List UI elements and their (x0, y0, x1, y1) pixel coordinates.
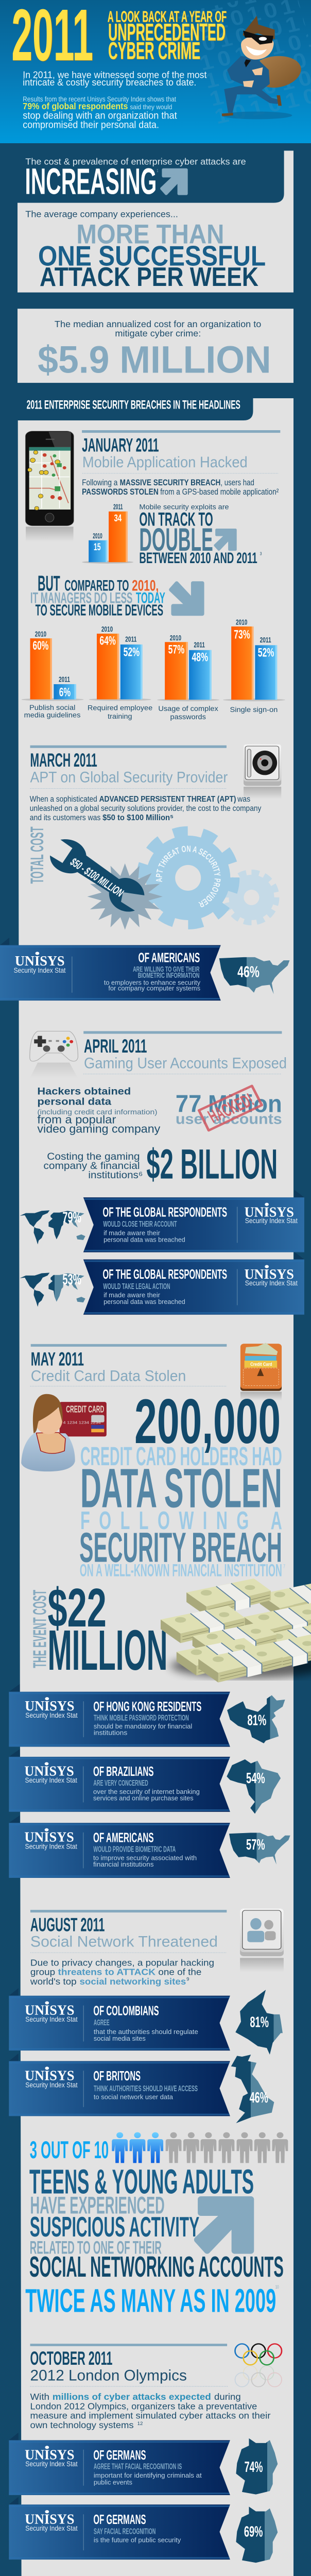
ribbon: Colombians: AGREE (94, 2018, 110, 2027)
icon: social network (240, 1908, 284, 1972)
ribbon: Hong Kong residents: Security Index Stat (25, 1711, 78, 1720)
ribbon: Colombians: social media sites (94, 2035, 146, 2042)
binary pattern (172, 0, 311, 131)
ribbon: Hong Kong residents: should be mandatory for financial (94, 1723, 192, 1730)
text: massive security breach: MASSIVE SECURITY BREACH (120, 478, 220, 487)
ribbon: Americans biometric data: financial institutions (93, 1861, 154, 1868)
ribbon: Brazilians: ARE VERY CONCERNED (93, 1778, 148, 1788)
ribbon: Hong Kong residents: institutions (94, 1730, 127, 1737)
section: header (11, 0, 311, 292)
intro text: stop dealing with an organization that (23, 111, 177, 121)
stat: 200,000 credit card holders: FOLLOWING A (80, 1506, 282, 1535)
map: Colombia 81% (235, 1990, 283, 2055)
text: olympics description: during (214, 2392, 241, 2402)
ribbon: Germans facial recognition important: AGREE THAT FACIAL RECOGNITION IS (94, 2462, 182, 2471)
text: olympics description (30, 2392, 270, 2430)
text: cost and prevalence: The cost & prevalence of enterprise cyber attacks are (25, 157, 246, 167)
section: teens and October (9, 2192, 284, 2495)
icon: wallet (240, 1343, 282, 1400)
ribbon: Britons: OF BRITONS (93, 2068, 141, 2083)
divider bar: October (30, 2344, 227, 2346)
ribbon: Americans biometric: Security Index Stat (14, 967, 66, 975)
divider bar: May (31, 1344, 227, 1347)
text: massive security breach (82, 478, 279, 497)
stat: 77 million hacked: user accounts (176, 1110, 282, 1127)
ribbon: Americans biometric data: UNISYS (24, 1829, 74, 1845)
text: olympics description: measure and implement simulated cyber attacks on their (30, 2411, 270, 2420)
header background (0, 0, 311, 143)
intro text: compromised their personal data. (23, 120, 159, 130)
ribbon: Americans biometric data: OF AMERICANS (93, 1830, 154, 1845)
text: median cost: $5.9 MILLION (38, 338, 271, 381)
section: May stats (21, 1386, 311, 1683)
map: USA 46% (219, 957, 289, 994)
text: hackers obtained: Hackers obtained (37, 1087, 131, 1097)
bar chart: mobile exploits: 2010 (93, 532, 102, 540)
icon: credit card: 4 1234 1234 1234 (63, 1420, 101, 1425)
panel: breaches in the headlines (18, 398, 293, 2576)
ribbon: Germans facial recognition future: SAY FACIAL RECOGNITION (94, 2527, 156, 2536)
ribbon: Germans facial recognition important: Security Index Stat (25, 2460, 78, 2468)
divider bar: August (30, 1910, 227, 1912)
bar chart: usage of complex passwords: passwords (170, 713, 206, 721)
text: hackers obtained: personal data (37, 1096, 112, 1107)
stat: 77 million hacked (176, 1086, 282, 1130)
heading: January 2011 (82, 435, 278, 473)
ribbon: global respondents close account: UNISYS (245, 1205, 294, 1220)
bar chart: publish social media guidelines: 2010 (35, 630, 46, 638)
ribbon: Hong Kong residents: OF HONG KONG RESIDENTS (93, 1699, 201, 1714)
bar chart: usage of complex passwords: Usage of complex (158, 705, 218, 713)
icon: starburst (88, 863, 163, 930)
ribbon: Germans facial recognition important (9, 2433, 230, 2495)
bar chart: required employee training: training (108, 713, 132, 721)
text: threat description (30, 1958, 214, 1987)
map: Germany 69% (236, 2506, 278, 2563)
icon: smartphone with map (25, 431, 74, 541)
text: median cost: The median annualized cost for an organization to (55, 319, 261, 329)
ribbon: Americans biometric data: WOULD PROVIDE BIOMETRIC DATA (93, 1845, 176, 1854)
ribbon: Americans biometric: UNISYS (15, 954, 65, 969)
icon: credit card (60, 1402, 107, 1436)
stat: 2 billion (43, 1141, 278, 1188)
ribbon: Brazilians (9, 1749, 230, 1812)
map: world 53% (20, 1271, 85, 1307)
text: median cost (38, 319, 271, 381)
heading: March 2011: APT on Global Security Provider (30, 769, 228, 786)
map: USA 57% (229, 1833, 290, 1865)
bar chart: mobile exploits: 15 (94, 541, 101, 553)
heading: May 2011: Credit Card Data Stolen (31, 1367, 186, 1384)
heading: but compared to 2010: TODAY (136, 589, 165, 606)
map: China 81%: 81% (247, 1712, 266, 1728)
bar chart: required employee training: 64% (99, 634, 116, 648)
map: USA 57%: 57% (246, 1836, 265, 1853)
ribbon: Americans biometric: for company computer systems (108, 985, 200, 992)
text: more than one successful attack per week: The average company experiences... (25, 210, 178, 219)
section: August (9, 1908, 288, 2201)
bar chart: required employee training: 52% (124, 646, 140, 659)
section: May stats: MILLION (47, 1619, 168, 1683)
icon: wallet: Credit Card (250, 1362, 272, 1367)
text: massive security breach: , users had (220, 478, 254, 487)
text: threat description: world's top (30, 1976, 77, 1987)
ribbon: Germans facial recognition important: important for identifying criminals at (94, 2472, 202, 2479)
text: threat description: Due to privacy changes, a popular hacking (30, 1958, 214, 1968)
text: on track to double: ON TRACK TO (139, 510, 213, 530)
ribbon: Americans biometric: to employers to enhance security (104, 979, 200, 986)
heading: October 2011: 2012 London Olympics (30, 2367, 187, 2384)
map: Germany 74% (236, 2438, 278, 2495)
heading: August 2011: Social Network Threatened (30, 1933, 218, 1950)
text: suspicious activity (29, 2192, 284, 2283)
bar chart: mobile exploits: 2011 (113, 503, 123, 511)
ribbon: global respondents legal action: UNISYS (245, 1267, 294, 1282)
stat: 200,000 credit card holders (79, 1386, 285, 1580)
ribbon: Germans facial recognition future: Security Index Stat (25, 2524, 78, 2533)
heading: October 2011: OCTOBER 2011 (30, 2348, 112, 2369)
arrow: double up (215, 530, 235, 550)
ribbon: global respondents close account: if made aware their (103, 1230, 160, 1237)
section: IT managers and March: TO SECURE MOBILE DEVICES (36, 601, 163, 619)
heading: increasing (25, 161, 159, 202)
map: UK 46% (231, 2055, 274, 2123)
bar chart: usage of complex passwords: 2011 (194, 641, 205, 649)
heading: March 2011 (30, 750, 228, 789)
text: threat description: threatens to ATTACK (58, 1967, 156, 1977)
text: olympics description: London 2012 Olympics, organizers take a preventative (30, 2401, 257, 2411)
ribbon: Colombians: OF COLOMBIANS (93, 2003, 159, 2018)
bar chart: usage of complex passwords: 57% (168, 643, 184, 656)
heading: August 2011 (30, 1914, 226, 1953)
bar chart: usage of complex passwords (157, 634, 219, 721)
text: massive security breach: Following a (82, 478, 118, 487)
text: suspicious activity: HAVE EXPERIENCED (30, 2192, 165, 2219)
ribbon: Colombians: that the authorities should regulate (94, 2028, 198, 2036)
map: China 81% (227, 1695, 285, 1743)
ribbon: Brazilians: over the security of internet banking (93, 1788, 200, 1795)
text: more than one successful attack per week (25, 210, 266, 292)
intro text (23, 70, 207, 130)
bar chart: mobile exploits: 34 (114, 513, 122, 524)
heading: but compared to 2010: 2010, (132, 577, 159, 594)
section: median cost and January (25, 319, 280, 566)
intro text: In 2011, we have witnessed some of the most (23, 70, 207, 80)
heading: October 2011 (30, 2348, 228, 2386)
heading: August 2011: AUGUST 2011 (30, 1914, 105, 1936)
section: Unisys stats (9, 1684, 290, 1912)
map: Brazil 54% (227, 1759, 281, 1814)
icon: game controller (30, 1031, 78, 1078)
ribbon: Britons: UNISYS (25, 2068, 74, 2083)
ribbon: global respondents legal action: personal data was breached (103, 1298, 185, 1306)
ribbon: Germans facial recognition future: UNISYS (25, 2512, 74, 2527)
text: hackers obtained (37, 1087, 160, 1136)
pictogram: 3 of 10 people (112, 2132, 288, 2163)
text: threat description: one of the (158, 1967, 201, 1977)
ribbon: Britons: to social network user data (94, 2093, 173, 2100)
stat: 2 billion: Costing the gaming (47, 1151, 140, 1162)
text: olympics description: With (30, 2392, 49, 2402)
text: APT description: ADVANCED PERSISTENT THREAT (APT) (99, 794, 236, 804)
map: world 53%: 53% (62, 1271, 81, 1288)
stat: twice as many: 10 (275, 2284, 279, 2290)
stat: 77 million hacked: 77 Million (176, 1090, 282, 1117)
ribbon: Colombians: Security Index Stat (25, 2015, 78, 2024)
text: olympics description: own technology systems (30, 2420, 134, 2430)
ribbon: global respondents close account: personal data was breached (103, 1236, 185, 1243)
bar chart: single sign-on: 73% (234, 628, 250, 641)
ribbon: Brazilians: UNISYS (24, 1764, 74, 1779)
bar chart: publish social media guidelines: 60% (33, 639, 48, 652)
vertical label: total cost: TOTAL COST (27, 826, 47, 884)
ribbon: global respondents close account: WOULD CLOSE THEIR ACCOUNT (103, 1219, 177, 1229)
text: massive security breach: PASSWORDS STOLEN (82, 487, 159, 497)
arrow: up right (162, 170, 186, 194)
divider bar: March (30, 745, 227, 748)
ribbon: Germans facial recognition important: OF GERMANS (93, 2448, 146, 2463)
heading: but compared to 2010: BUT (38, 572, 60, 596)
bar chart: single sign-on: 2011 (260, 636, 271, 645)
section: APT graphic and April (0, 826, 289, 1075)
ribbon: Germans facial recognition important: UNISYS (25, 2447, 74, 2463)
section: April stats and May (20, 1086, 304, 1400)
text: APT description: was (237, 794, 250, 804)
map: Germany 69%: 69% (244, 2523, 263, 2540)
text: hackers obtained: from a popular (37, 1113, 116, 1126)
ribbon: Britons: THINK AUTHORITIES SHOULD HAVE ACCESS (94, 2084, 198, 2093)
ribbon: Germans facial recognition future: is the future of public security (94, 2536, 181, 2544)
intro text: intricate & costly security breaches to date. (23, 77, 196, 88)
map: Brazil 54%: 54% (246, 1770, 265, 1787)
ribbon: Germans facial recognition important: public events (94, 2479, 132, 2486)
heading: March 2011: MARCH 2011 (30, 750, 97, 771)
bar chart: publish social media guidelines: media guidelines (24, 711, 81, 719)
text: hackers obtained: (including credit card information) (37, 1108, 157, 1116)
section: IT managers and March (22, 572, 285, 822)
ribbon: Hong Kong residents (9, 1684, 230, 1747)
stat: 77 million hacked: HACKED! (205, 1090, 257, 1127)
vertical label: the event cost: THE EVENT COST (30, 1590, 50, 1668)
section: what would you do (0, 2497, 284, 2576)
ribbon: global respondents close account (83, 1190, 304, 1252)
heading: January 2011: JANUARY 2011 (82, 435, 159, 456)
text: on track to double: DOUBLE (139, 522, 213, 558)
bar chart: single sign-on (223, 618, 285, 714)
ribbon: Colombians (9, 1988, 230, 2050)
map: Colombia 81%: 81% (250, 2013, 269, 2030)
bar chart: required employee training: 2010 (101, 625, 113, 634)
icon: credit card: CREDIT CARD (66, 1404, 104, 1415)
bar chart: single sign-on: 2010 (236, 618, 248, 626)
text: threat description: 9 (186, 1977, 189, 1982)
text: APT description (30, 794, 262, 822)
ribbon: Britons: Security Index Stat (25, 2081, 78, 2089)
text: olympics description: 12 (137, 2421, 143, 2426)
stat: 22 million: $22 (47, 1577, 107, 1638)
text: threat description: social networking sites (79, 1976, 186, 1987)
intro text: Results from the recent Unisys Security Index shows that (23, 96, 176, 104)
ribbon: Americans biometric: ARE WILLING TO GIVE THEIR (133, 965, 200, 974)
text: suspicious activity: RELATED TO ONE OF THEIR (30, 2238, 162, 2258)
ribbon: Britons (9, 2054, 230, 2116)
ribbon: Americans biometric data: to improve security associated with (93, 1854, 197, 1861)
heading: May 2011 (30, 1349, 226, 1386)
icon: woman (21, 1394, 75, 1471)
icon: masked thief (221, 16, 301, 119)
heading: April 2011: APRIL 2011 (84, 1036, 147, 1057)
intro text: said they would (130, 104, 172, 111)
ribbon: Hong Kong residents: UNISYS (25, 1699, 74, 1714)
text: APT description: When a sophisticated (30, 794, 97, 804)
ribbon: Germans facial recognition future: OF GERMANS (93, 2512, 146, 2527)
panel: median cost (18, 309, 293, 383)
bar chart: required employee training: 2011 (125, 635, 137, 643)
stat: 22 million (47, 1577, 168, 1683)
ribbon: Americans biometric data: Security Index Stat (25, 1842, 77, 1851)
icon: wrench with cost (50, 839, 144, 912)
intro text: 79% of global respondents (23, 101, 128, 111)
ribbon: global respondents legal action (83, 1252, 304, 1315)
stat: 200,000 credit card holders: 7 (283, 1564, 285, 1569)
arrow: down right (171, 583, 202, 614)
heading: increasing: INCREASING (25, 161, 157, 202)
bar chart: usage of complex passwords: 2010 (170, 634, 181, 642)
ribbon: Brazilians: Security Index Stat (25, 1776, 77, 1785)
map: UK 46%: 46% (250, 2089, 268, 2106)
ribbon: Brazilians: OF BRAZILIANS (93, 1764, 154, 1779)
icon: olympic rings (235, 2344, 282, 2387)
heading: May 2011: MAY 2011 (31, 1349, 84, 1370)
text: on track to double: 3 (260, 551, 262, 556)
panel: increasing attacks (18, 150, 293, 293)
ribbon: global respondents legal action: WOULD TAKE LEGAL ACTION (103, 1282, 170, 1291)
section: August: 3 OUT OF 10 (30, 2137, 109, 2163)
ribbon: Americans biometric data (9, 1815, 230, 1878)
icon: big gear with APT threat text (137, 826, 240, 929)
divider bar: April (83, 1031, 282, 1034)
bar chart: usage of complex passwords: 48% (192, 651, 208, 664)
text: threat description: group (30, 1967, 55, 1977)
text: on track to double: Mobile security exploits are (139, 503, 229, 511)
map: world 79% (20, 1209, 85, 1244)
bar chart: publish social media guidelines: 6% (59, 686, 71, 699)
icon: safe (244, 744, 281, 799)
heading: January 2011: Mobile Application Hacked (82, 453, 248, 470)
bar chart: publish social media guidelines (22, 630, 84, 719)
ribbon: Germans facial recognition future (9, 2497, 230, 2560)
bar chart: required employee training (88, 625, 152, 721)
ribbon: Hong Kong residents: THINK MOBILE PASSWORD PROTECTION (94, 1714, 189, 1722)
text: median cost: mitigate cyber crime: (115, 329, 201, 339)
heading: but compared to 2010: COMPARED TO (64, 577, 129, 594)
bar chart: publish social media guidelines: Publish social (29, 704, 75, 712)
stat: 2 billion: institutions⁶ (88, 1170, 143, 1180)
bar chart: mobile exploits (82, 503, 133, 564)
icon: big gear with APT threat text: APT THREAT ON A SECURITY PROVIDER (156, 845, 220, 907)
heading: increasing: 1 (157, 168, 159, 173)
ribbon: global respondents legal action: if made aware their (103, 1292, 160, 1299)
icon: small gear (227, 873, 277, 922)
ribbon: Americans biometric (0, 938, 221, 1001)
ribbon: Brazilians: services and online purchase sites (93, 1794, 194, 1802)
text: APT description: and its customers was (30, 813, 100, 822)
text: APT description: $50 to $100 Million⁵ (102, 813, 174, 822)
map: USA 46%: 46% (237, 962, 260, 980)
divider bar: January (82, 430, 280, 433)
stat: 2 billion: company & financial (43, 1160, 140, 1171)
ribbon: Colombians: UNISYS (25, 2003, 74, 2018)
icon: wrench with cost: $50 - $100 MILLION (67, 856, 126, 899)
text: hackers obtained: video gaming company (37, 1123, 160, 1136)
ribbon: Americans biometric: BIOMETRIC INFORMATION (138, 972, 200, 980)
ribbon: Americans biometric: OF AMERICANS (139, 950, 200, 965)
bar chart: required employee training: Required employee (88, 704, 152, 712)
heading: but compared to 2010: IT MANAGERS DO LESS (30, 589, 132, 606)
title: 2011: CYBER CRIME (108, 38, 200, 64)
bar chart: publish social media guidelines: 2011 (59, 675, 70, 684)
text: more than one successful attack per week: MORE THAN (76, 219, 224, 249)
map: world 79%: 79% (62, 1209, 81, 1226)
bar chart: single sign-on: Single sign-on (230, 706, 278, 714)
heading: but compared to 2010 (30, 572, 165, 619)
bar chart: single sign-on: 52% (258, 646, 274, 659)
text: olympics description: millions of cyber attacks expected (53, 2392, 211, 2402)
arrow: large up right (197, 2199, 251, 2251)
icon: money pile (161, 1579, 311, 1683)
map: Germany 74%: 74% (245, 2459, 263, 2476)
heading: April 2011 (83, 1036, 287, 1074)
text: on track to double (139, 503, 262, 566)
